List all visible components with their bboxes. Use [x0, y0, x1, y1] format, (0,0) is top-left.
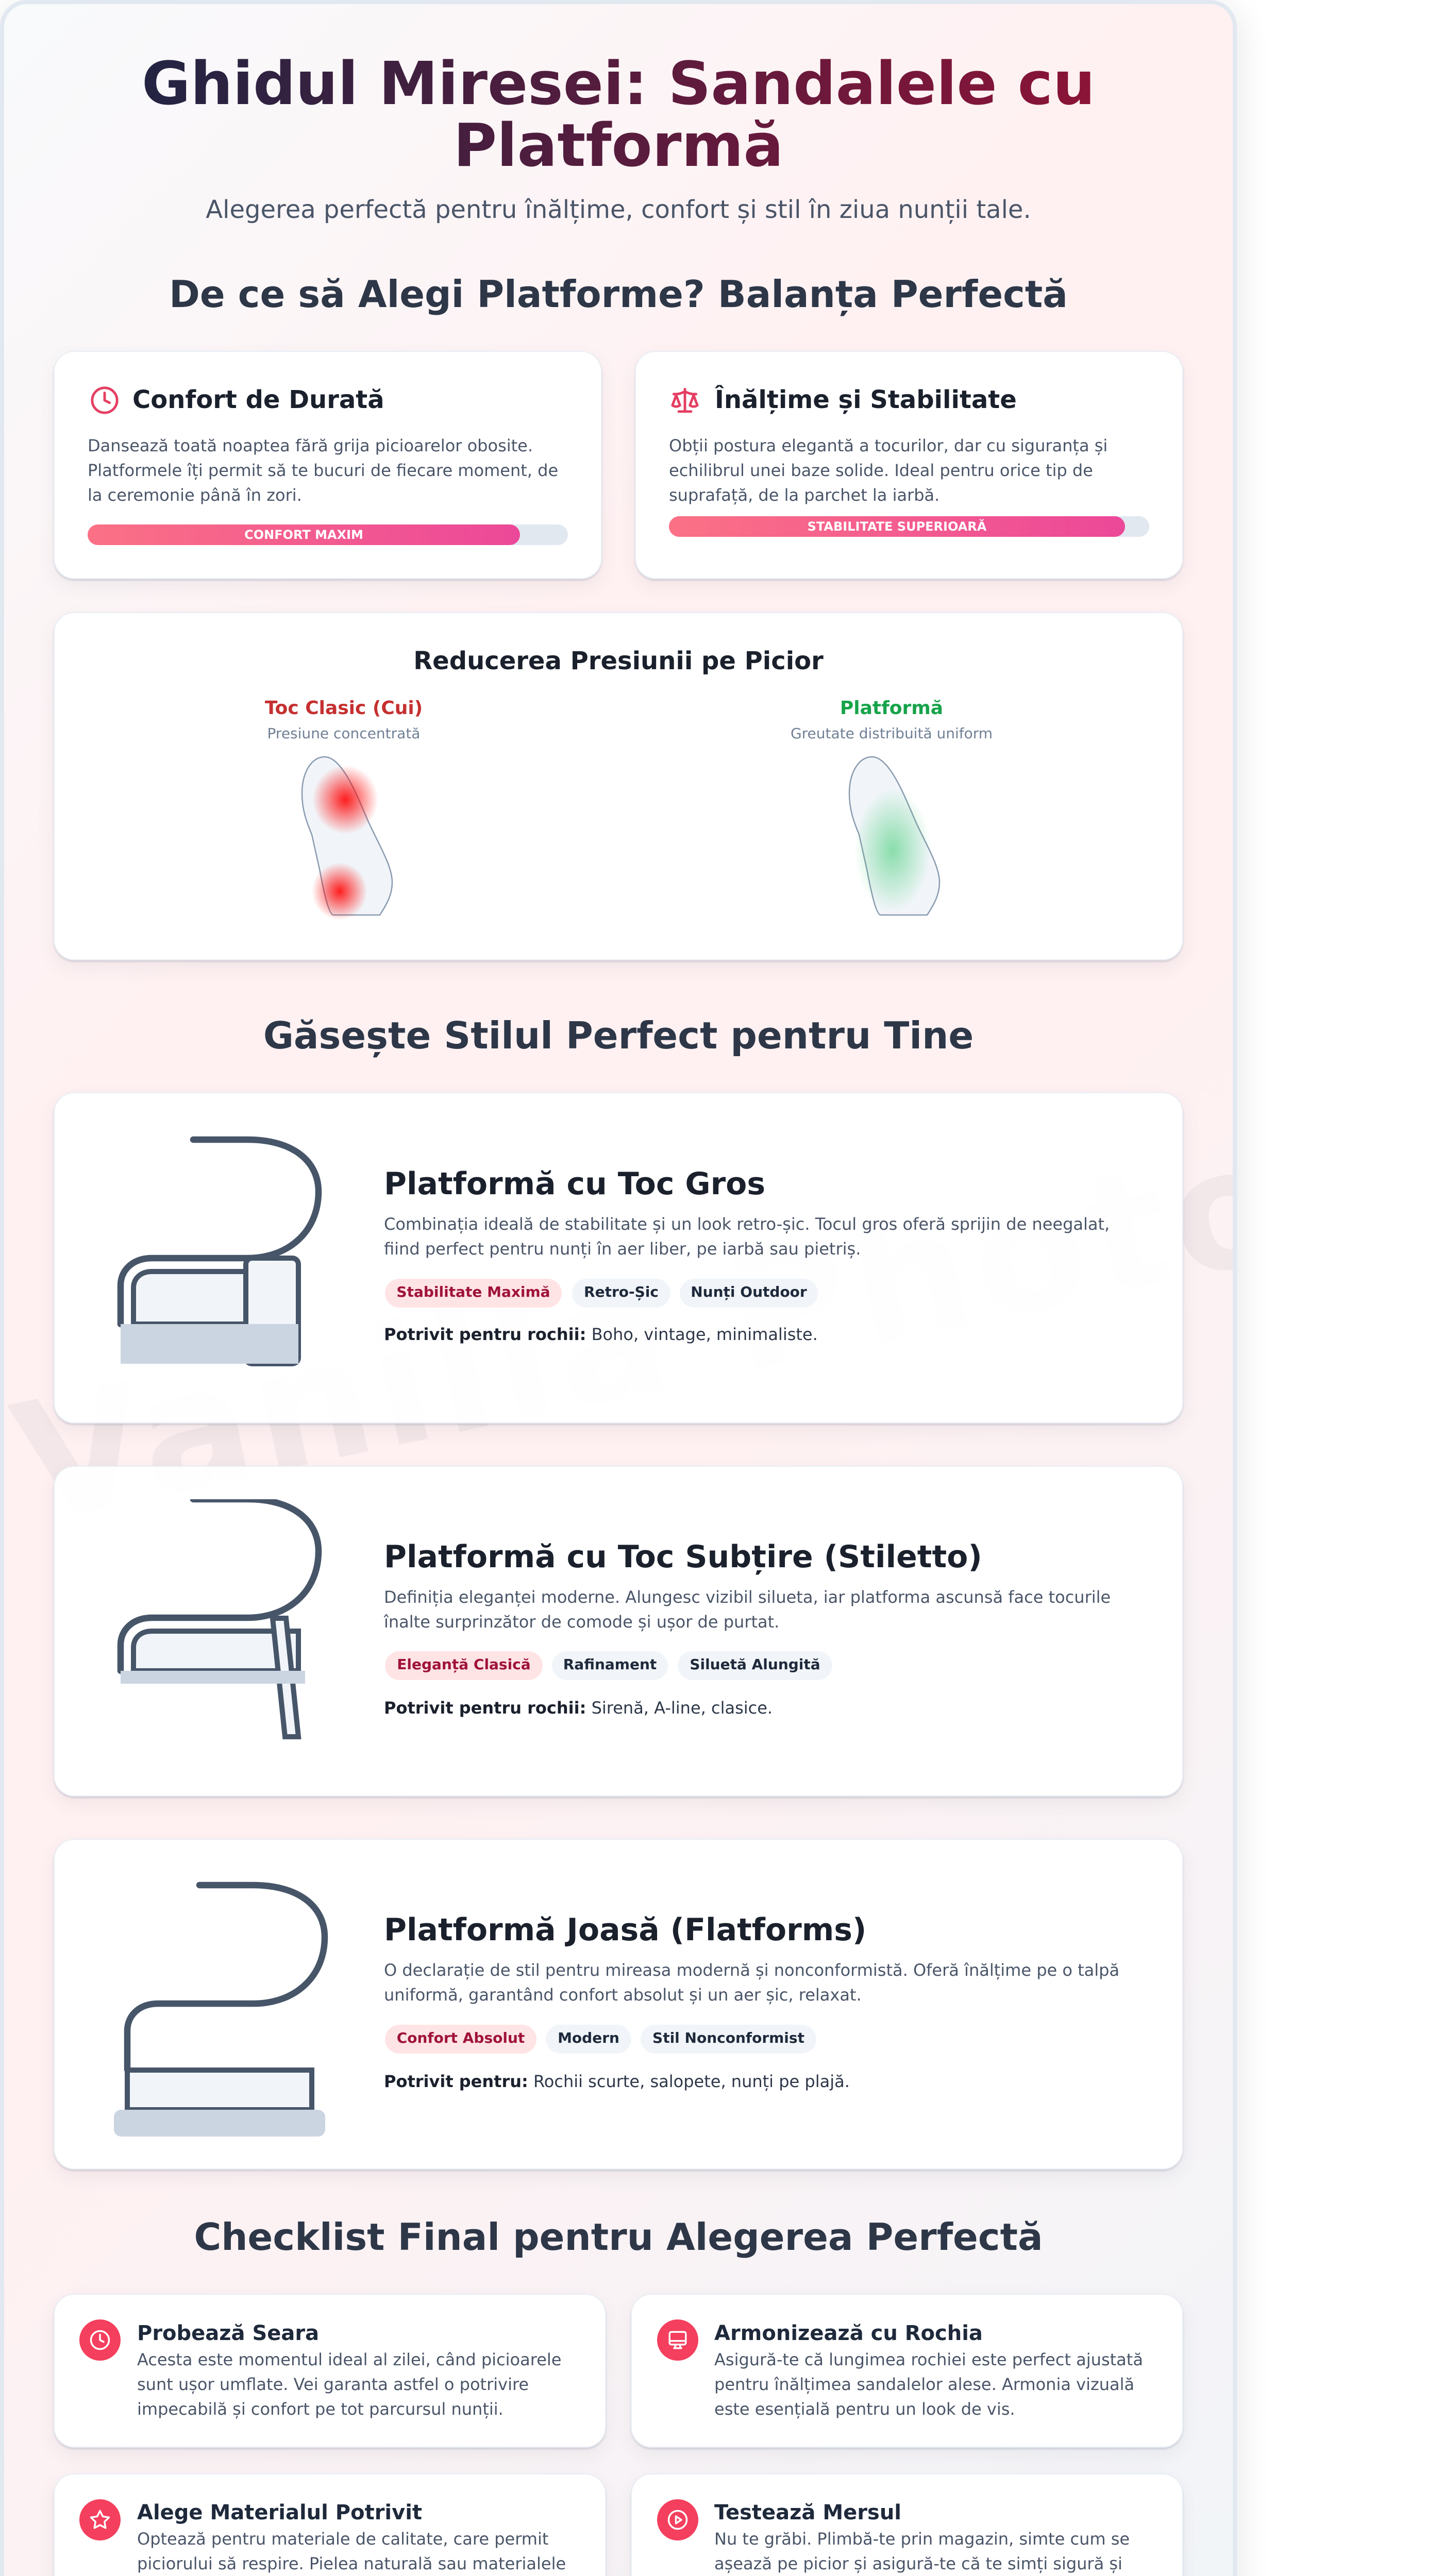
item title: Armonizează cu Rochia: [714, 2321, 983, 2345]
panel: low flatforms: Stil Nonconformist: [652, 2029, 804, 2046]
card text: [669, 436, 1108, 505]
illustration: stiletto sandal: [118, 1499, 322, 1739]
item title: Alege Materialul Potrivit: [137, 2501, 422, 2524]
checklist item: test walking: așează pe picior și asigură-te că te simți sigură și: [714, 2554, 1122, 2573]
label: platform: Platformă: [840, 698, 943, 719]
diagram: platform foot: [848, 756, 940, 916]
caption: classic heel: Presiune concentrată: [267, 725, 420, 742]
panel: confort de durata: la ceremonie până în zori.: [88, 485, 302, 505]
panel heading: Reducerea Presiunii pe Picior: [413, 647, 824, 675]
caption: platform: Greutate distribuită uniform: [791, 725, 993, 742]
panel: confort de durata: [54, 351, 602, 579]
card title: Înălțime și Stabilitate: [715, 385, 1017, 414]
panel: chunky heel platform: Retro-Șic: [584, 1283, 659, 1300]
panel: stiletto platform: Eleganță Clasică: [397, 1656, 531, 1673]
description: [383, 1587, 1111, 1632]
panel: stiletto platform: înalte surprinzător de comode și ușor de purtat.: [384, 1612, 779, 1632]
icon: star badge: [79, 2499, 121, 2540]
panel: inaltime si stabilitate: [635, 351, 1183, 579]
description: [384, 1960, 1119, 2005]
checklist item: choose material: Optează pentru materiale de calitate, care permit: [137, 2529, 548, 2549]
checklist item: try in the evening: sunt ușor umflate. Vei garanta astfel o potrivire: [137, 2375, 529, 2394]
card title: Confort de Durată: [132, 385, 384, 414]
label: classic heel: Toc Clasic (Cui): [265, 698, 423, 719]
card title: Platformă Joasă (Flatforms): [384, 1912, 866, 1948]
panel: low flatforms: uniformă, garantând confort absolut și un aer șic, relaxat.: [384, 1985, 862, 2005]
panel: inaltime si stabilitate: Obții postura elegantă a tocurilor, dar cu siguranța și: [669, 436, 1108, 455]
card title: Platformă cu Toc Subțire (Stiletto): [384, 1539, 982, 1575]
icon: clock badge: [79, 2319, 121, 2361]
panel: stiletto platform: Rafinament: [563, 1656, 657, 1673]
checklist item: match the dress: pentru înălțimea sandalelor alese. Armonia vizuală: [714, 2375, 1134, 2394]
diagram: classic heel foot: [301, 756, 393, 919]
checklist item: test walking: Nu te grăbi. Plimbă-te prin magazin, simte cum se: [714, 2529, 1130, 2549]
checklist item: choose material: piciorului să respire. Pielea naturală sau materialele: [137, 2554, 566, 2573]
progress bar: confort maxim: [88, 524, 568, 545]
panel: low flatforms: Modern: [558, 2029, 619, 2046]
progress bar: confort maxim: CONFORT MAXIM: [244, 528, 363, 542]
panel: low flatforms: O declarație de stil pentru mireasa modernă și nonconformistă. Oferă înălțime pe o talpă: [384, 1960, 1119, 1980]
checklist item: match the dress: [631, 2294, 1183, 2448]
tags: [385, 1279, 818, 1308]
illustration: chunky heel sandal: [118, 1137, 322, 1366]
checklist item: try in the evening: impecabilă și confort pe tot parcursul nunții.: [137, 2399, 504, 2419]
title: Platformă: [454, 111, 783, 180]
heading: why platforms: De ce să Alegi Platforme? Balanța Perfectă: [169, 273, 1068, 316]
description: [384, 1214, 1110, 1259]
tags: [385, 2025, 816, 2054]
panel: chunky heel platform: Combinația ideală de stabilitate și un look retro-șic. Tocul gros oferă sprijin de neegalat,: [384, 1214, 1110, 1234]
icon: scale: [671, 387, 699, 413]
item text: [54, 2473, 606, 2474]
item text: [54, 2293, 606, 2294]
item title: Probează Seara: [137, 2321, 319, 2345]
icon: clock: [91, 386, 119, 414]
progress bar: stabilitate superioara: [669, 516, 1149, 537]
illustration: flatform sandal: [114, 1882, 328, 2137]
panel: inaltime si stabilitate: suprafață, de la parchet la iarbă.: [669, 485, 939, 505]
checklist item: match the dress: Asigură-te că lungimea rochiei este perfect ajustată: [714, 2350, 1143, 2369]
checklist item: match the dress: este esențială pentru un look de vis.: [714, 2399, 1015, 2419]
suitability note: Potrivit pentru rochii: Sirenă, A-line, clasice.: [384, 1698, 773, 1718]
panel: stiletto platform: Definiția eleganței moderne. Alungesc vizibil silueta, iar platforma ascunsă face tocurile: [384, 1587, 1111, 1607]
tags: [385, 1651, 832, 1680]
checklist item: choose material: [54, 2473, 606, 2576]
item text: [631, 2473, 1183, 2474]
panel: confort de durata: Dansează toată noaptea fără grija picioarelor obosite.: [88, 436, 533, 455]
heading: final checklist: Checklist Final pentru Alegerea Perfectă: [194, 2215, 1043, 2259]
checklist item: test walking: [631, 2473, 1183, 2576]
item text: [631, 2293, 1183, 2294]
checklist item: try in the evening: [54, 2294, 606, 2448]
panel: stiletto platform: [54, 1466, 1183, 1797]
panel: stiletto platform: Siluetă Alungită: [690, 1656, 820, 1673]
card title: Platformă cu Toc Gros: [384, 1166, 765, 1202]
panel: confort de durata: Platformele îți permit să te bucuri de fiecare moment, de: [88, 461, 558, 480]
panel: chunky heel platform: Stabilitate Maximă: [396, 1283, 550, 1300]
panel: inaltime si stabilitate: echilibrul unei baze solide. Ideal pentru orice tip de: [669, 461, 1093, 480]
panel: chunky heel platform: [54, 1092, 1183, 1423]
heading: find your style: Găsește Stilul Perfect pentru Tine: [263, 1014, 974, 1057]
title: [54, 53, 1183, 182]
icon: monitor badge: [657, 2319, 698, 2361]
panel: low flatforms: Confort Absolut: [397, 2029, 525, 2046]
suitability note: Potrivit pentru: Rochii scurte, salopete, nunți pe plajă.: [384, 2072, 850, 2091]
subtitle: Alegerea perfectă pentru înălțime, confort și stil în ziua nunții tale.: [206, 195, 1031, 224]
suitability note: Potrivit pentru rochii: Boho, vintage, minimaliste.: [384, 1325, 818, 1344]
progress bar: stabilitate superioara: STABILITATE SUPERIOARĂ: [808, 519, 986, 534]
panel: chunky heel platform: Nunți Outdoor: [691, 1283, 807, 1300]
checklist item: try in the evening: Acesta este momentul ideal al zilei, când picioarele: [137, 2350, 561, 2369]
panel: pressure comparison: [54, 612, 1183, 960]
panel: low flatforms: [54, 1839, 1183, 2170]
title: Ghidul Miresei: Sandalele cu: [142, 49, 1095, 118]
item title: Testează Mersul: [714, 2501, 901, 2524]
panel: chunky heel platform: fiind perfect pentru nunți în aer liber, pe iarbă sau pietriș.: [384, 1239, 861, 1259]
icon: play badge: [657, 2499, 698, 2540]
card text: [88, 436, 558, 505]
